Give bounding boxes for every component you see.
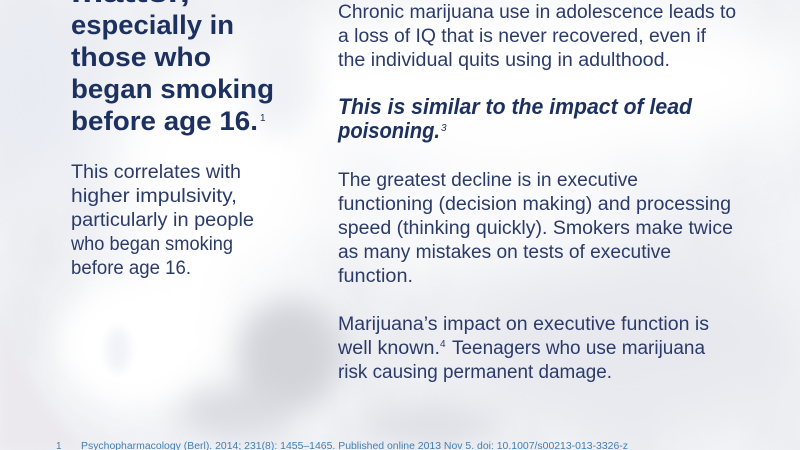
text block: IQ loss: Chronic marijuana use in adolescence leads to xyxy=(338,2,736,23)
text block: permanent damage xyxy=(337,314,709,383)
title: left column heading: especially in xyxy=(71,10,234,40)
callout: lead poisoning comparison: 3 xyxy=(441,123,447,134)
text block: IQ loss xyxy=(338,2,736,71)
text block: impulsivity note: This correlates with xyxy=(71,162,241,183)
text block: impulsivity note xyxy=(70,162,254,279)
title: left column heading: began smoking xyxy=(71,74,274,104)
title: left column heading: 1 xyxy=(260,113,266,124)
text block: executive functioning decline: function. xyxy=(338,266,413,287)
callout: lead poisoning comparison: poisoning. xyxy=(337,118,440,143)
text block: impulsivity note: higher impulsivity, xyxy=(71,186,237,207)
text block: impulsivity note: who began smoking xyxy=(70,234,233,255)
text block: permanent damage: well known. xyxy=(337,338,440,359)
text block: impulsivity note: before age 16. xyxy=(71,258,191,279)
title: left column heading: before age 16. xyxy=(71,106,258,136)
text block: executive functioning decline: functioning (decision making) and processing xyxy=(338,194,731,215)
text block: IQ loss: a loss of IQ that is never recovered, even if xyxy=(338,26,707,47)
callout: lead poisoning comparison: This is similar to the impact of lead xyxy=(338,94,693,119)
text block: executive functioning decline: as many mistakes on tests of executive xyxy=(338,242,671,263)
text block: impulsivity note: particularly in people xyxy=(71,210,254,231)
text block: permanent damage: Marijuana’s impact on executive function is xyxy=(338,314,709,335)
text block: executive functioning decline: speed (thinking quickly). Smokers make twice xyxy=(338,218,733,239)
callout: lead poisoning comparison xyxy=(337,94,693,143)
text block: permanent damage: risk causing permanent damage. xyxy=(338,362,612,383)
text block: IQ loss: the individual quits using in adulthood. xyxy=(338,50,670,71)
title: left column heading: those who xyxy=(71,42,211,72)
text block: permanent damage: 4 xyxy=(440,339,446,350)
text block: permanent damage: Teenagers who use marijuana xyxy=(452,338,705,359)
text block: executive functioning decline: The greatest decline is in executive xyxy=(338,170,638,191)
text block: executive functioning decline xyxy=(338,170,733,287)
title: left column heading xyxy=(71,0,274,136)
